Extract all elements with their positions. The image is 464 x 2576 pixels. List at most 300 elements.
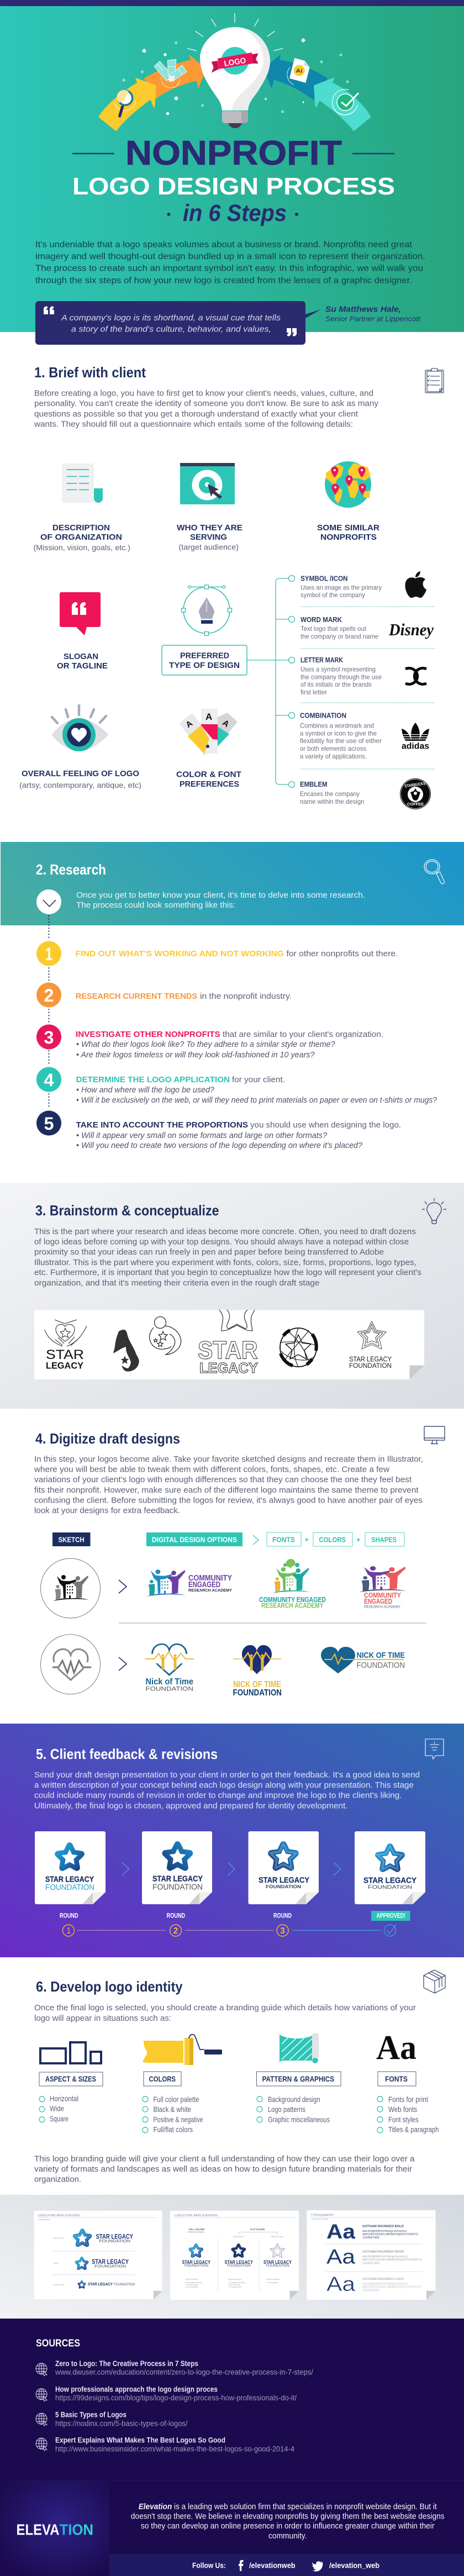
illustration: light bulb with process arrows — [99, 13, 370, 130]
icon: overall feeling eye — [51, 705, 109, 751]
design type: letter mark — [300, 656, 426, 696]
heading: 1. Brief with client — [34, 364, 146, 381]
research item 4 — [76, 1075, 437, 1105]
body text: organization, and that it's meeting their criteria even in the rough draft stage — [34, 1279, 319, 1288]
column: pattern and graphics — [256, 2033, 341, 2124]
label: overall feeling of logo — [19, 769, 141, 789]
column: pattern and graphics: Logo patterns — [268, 2105, 305, 2114]
logo: disney: Disney — [388, 620, 434, 639]
arrow: heart logos — [119, 1657, 126, 1671]
quote marks — [44, 306, 297, 336]
sketch: lined star — [349, 1321, 392, 1369]
icon: slogan speech bubble — [60, 592, 101, 635]
research item 4: DETERMINE THE LOGO APPLICATION — [76, 1075, 230, 1084]
design type: letter mark: LETTER MARK — [300, 656, 343, 664]
brand guide page 3: GOTHAM ROUNDED LIGHT — [362, 2278, 405, 2281]
sketch circle: heart — [41, 1635, 101, 1694]
source 3: 5 Basic Types of Logos — [55, 2411, 126, 2419]
column: aspect and sizes — [39, 2042, 103, 2123]
body text — [34, 389, 379, 429]
logo option: community A: COMMUNITY — [188, 1574, 232, 1583]
round timeline — [63, 1925, 396, 1936]
sketch: lined star: FOUNDATION — [349, 1362, 392, 1369]
round labels — [60, 1913, 292, 1919]
body text: variations of your client's logo with enough differences so that they can choose the one they feel best — [34, 1476, 412, 1484]
brand guide page 3: 1234567890 — [362, 2289, 379, 2293]
quote attribution: Senior Partner at Lippencott — [325, 315, 421, 323]
brand guide page 1: STAR LEGACY — [88, 2282, 113, 2287]
title: NONPROFIT — [125, 134, 342, 172]
tag: sketch — [52, 1532, 91, 1546]
tags: fonts colors shapes: COLORS — [319, 1536, 346, 1544]
logo: starbucks: STARBUCKS — [404, 781, 426, 789]
round 1 card: FOUNDATION — [45, 1883, 94, 1892]
column: colors: COLORS — [149, 2074, 176, 2083]
research item 3: • Are their logos timeless or will they look old-fashioned in 10 years? — [76, 1051, 315, 1060]
column: pattern and graphics: Background design — [268, 2095, 320, 2104]
label: who they are serving: WHO THEY ARE — [177, 523, 242, 533]
design type: combination: flexibility for the use of either — [300, 737, 382, 745]
brand guide page 3: 1234567890 — [362, 2236, 379, 2240]
label: description of organization: (Mission, vision, goals, etc.) — [33, 543, 130, 552]
design type: letter mark: first letter — [300, 688, 327, 696]
brand guide page 3: GOTHAM ROUNDED BOLD — [362, 2225, 404, 2229]
icon: chat bubble — [425, 1739, 444, 1759]
design type: combination: COMBINATION — [300, 712, 346, 720]
panel: sources — [0, 2319, 464, 2576]
panel: step 3 brainstorm — [0, 1183, 464, 1409]
logo: adidas — [402, 723, 429, 751]
title: in 6 Steps — [183, 200, 287, 226]
brand guide page 2: 1 single color printing — [228, 2283, 240, 2286]
column: aspect and sizes: Square — [50, 2114, 68, 2123]
brand guide page 1: STAR LEGACY — [92, 2258, 129, 2266]
column: fonts — [376, 2029, 439, 2134]
source 4: http://www.businessinsider.com/what-makes-the-best-logos-so-good-2014-4 — [55, 2445, 294, 2453]
body text: Illustrator. This is the part where you experiment with fonts, colors, size, forms, proportions, logo types, — [34, 1258, 416, 1267]
design type: word mark: Text logo that spells out — [300, 625, 367, 633]
logo option: community A — [146, 1569, 232, 1597]
intro text: Once you get to better know your client, it's time to delve into some research. — [76, 891, 365, 900]
round 2 card: STAR LEGACY — [152, 1875, 203, 1884]
approved card: FOUNDATION — [368, 1884, 412, 1890]
research timeline — [36, 889, 61, 1136]
sketch: outlined star legacy: LEGACY — [199, 1360, 258, 1376]
round 2 card — [142, 1831, 212, 1904]
label: description of organization — [33, 523, 130, 552]
step 1 node — [36, 941, 61, 966]
round 1 card — [35, 1831, 106, 1904]
follow us bar — [109, 2554, 464, 2576]
closing text: This logo branding guide will give your client a full understanding of how they can use their logo over a — [34, 2154, 415, 2164]
design type: emblem: EMBLEM — [300, 781, 327, 788]
column: aspect and sizes: Wide — [50, 2104, 64, 2113]
research item 2 — [76, 992, 292, 1001]
panel: step 5 client feedback — [0, 1724, 464, 1957]
logo option: nick of time C — [321, 1647, 405, 1673]
brand guide page 2: FOUNDATION — [227, 2264, 251, 2268]
body text — [34, 2004, 416, 2023]
icon: clipboard — [425, 368, 444, 393]
icon: frames — [40, 2042, 101, 2063]
source 3: https://nodinx.com/5-basic-types-of-logos/ — [55, 2419, 188, 2427]
research item 2: RESEARCH CURRENT TRENDS — [76, 992, 197, 1001]
design type: emblem — [300, 778, 431, 809]
sketch: hands and star: LEGACY — [46, 1361, 84, 1371]
brand guide page 3: Aa — [326, 2246, 355, 2268]
step 5 node: 5 — [44, 1114, 54, 1134]
column: aspect and sizes: ASPECT & SIZES — [45, 2074, 96, 2083]
column: pattern and graphics: Graphic miscellaneous — [268, 2115, 330, 2124]
design type: symbol icon — [300, 571, 426, 599]
body text: questions as possible so that you get a thorough understand of exactly what your client — [34, 410, 358, 419]
brand guide page 1: FOUNDATION — [114, 2283, 135, 2287]
brand guide page 1: Wide — [53, 2262, 59, 2264]
follow us bar: /elevationweb — [249, 2561, 296, 2569]
icon: colour and font cards: A — [220, 718, 231, 729]
brand guide page 2: LOGOTYPE APPLICATIONS — [175, 2214, 218, 2217]
body text — [34, 1455, 423, 1515]
logo ribbon: LOGO — [223, 56, 246, 69]
label: some similar nonprofits — [317, 523, 379, 542]
source 2 — [36, 2385, 297, 2402]
icon: monitor — [424, 1426, 445, 1444]
brand guide page 1 — [34, 2211, 162, 2299]
round 2 card: FOUNDATION — [152, 1883, 203, 1892]
design type: word mark — [300, 616, 434, 640]
brand guide page 2: 1 embroidery — [266, 2281, 278, 2284]
tags: fonts colors shapes: FONTS — [272, 1536, 295, 1544]
research item 2: in the nonprofit industry. — [200, 992, 292, 1001]
icon: colour and font cards: A — [184, 719, 194, 730]
brand guide page 1: FOUNDATION — [99, 2238, 130, 2243]
body text: a written description of your concept behind each logo design along with your presentation. This stage — [34, 1781, 414, 1790]
design type: combination: a symbol or icon to give the — [300, 729, 377, 737]
panel: step 4 digitize — [34, 1426, 445, 1698]
body text: Before creating a logo, you have to first get to know your client's needs, values, culture, and — [34, 389, 373, 398]
round labels: ROUND — [273, 1913, 292, 1919]
follow us bar: /elevation_web — [329, 2561, 379, 2569]
brand guide page 3: TYPOGRAPHY — [310, 2214, 334, 2217]
brand guide page 2: 1 2-4 separate prints — [228, 2285, 241, 2288]
arrow: blue — [264, 55, 327, 99]
research item 5: you should use when designing the logo. — [250, 1120, 401, 1130]
label: some similar nonprofits: NONPROFITS — [320, 533, 377, 542]
about text: doesn't stop there. We believe in elevating nonprofits by giving them the best website designs — [131, 2512, 445, 2521]
brand guide page 3: abcdefghijklmnñopqrstuvwxyz — [362, 2283, 408, 2286]
heading: 3. Brainstorm & conceptualize — [35, 1202, 219, 1219]
icon: pattern roll — [280, 2033, 319, 2063]
brand guide page 2: FULL COLOUR — [189, 2228, 205, 2231]
research item 1: FIND OUT WHAT'S WORKING AND NOT WORKING — [76, 949, 284, 958]
icon: check mark — [333, 89, 358, 115]
icon: light bulb outline — [422, 1198, 446, 1224]
brand guide page 2: STAR LEGACY — [263, 2259, 292, 2266]
column: colors: Positive & negative — [154, 2115, 203, 2124]
research item 1 — [76, 949, 398, 958]
elevation logo: TION — [60, 2521, 93, 2538]
label: who they are serving — [177, 523, 242, 551]
icon: magnifier — [114, 90, 136, 116]
approved card — [355, 1831, 425, 1904]
step 4 node: 4 — [44, 1070, 54, 1090]
source 4: Expert Explains What Makes The Best Logos So Good — [55, 2436, 225, 2445]
research item 3: • What do their logos look like? To they adhere to a similar style or theme? — [76, 1040, 335, 1049]
sketch sheet — [34, 1310, 424, 1379]
elevation logo — [0, 2480, 109, 2576]
logo option: nick of time A — [145, 1644, 194, 1693]
brand guide page 1: STAR LEGACY — [96, 2233, 133, 2241]
label: description of organization: DESCRIPTION — [52, 523, 110, 533]
brand guide page 2: Outline Version — [271, 2235, 283, 2238]
icon: document — [62, 463, 103, 503]
brand guide page 3: GOTHAM ROUNDED BOOK — [362, 2250, 404, 2253]
step 2 node: 2 — [44, 986, 54, 1005]
step 3 node: 3 — [44, 1028, 54, 1047]
brand guide page 3: Aa — [326, 2273, 355, 2295]
research item 1: for other nonprofits out there. — [286, 949, 398, 958]
design type: word mark: the company or brand name — [300, 633, 378, 640]
icon: Aa: Aa — [376, 2029, 416, 2067]
intro text: The process could look something like this: — [76, 901, 235, 910]
tags: fonts colors shapes — [267, 1532, 404, 1546]
round timeline: 3 — [280, 1926, 285, 1936]
research item 4: • How and where will the logo be used? — [76, 1086, 215, 1095]
brand guide page 3: ABCDEFGHIJKLMNÑOPQRSTUVWXYZ — [362, 2232, 418, 2236]
brand guide page 2: FOUNDATION — [184, 2264, 208, 2268]
tags: fonts colors shapes: SHAPES — [371, 1536, 397, 1544]
column: fonts: Web fonts — [388, 2105, 417, 2114]
follow us bar: Follow Us: — [192, 2561, 226, 2569]
closing text: variety of formats and landscapes as well as ideas on how to design future branding materials for their — [34, 2164, 412, 2174]
design type: symbol icon: SYMBOL /ICON — [300, 575, 348, 582]
arrow: community logos — [119, 1580, 126, 1593]
brand guide page 2: FOUNDATION — [266, 2264, 289, 2268]
panel: brand guide samples — [0, 2195, 464, 2319]
round timeline: 2 — [173, 1926, 178, 1936]
approved card: STAR LEGACY — [363, 1877, 416, 1885]
label: overall feeling of logo: (artsy, contemporary, antique, etc) — [19, 781, 141, 789]
body text: confusing the client. Before submitting the logos for review, it's always good to have another pair of eyes — [34, 1496, 423, 1505]
arrows between rounds — [122, 1863, 341, 1876]
sketch circle: community — [41, 1558, 101, 1618]
icon: paint roller — [143, 2035, 222, 2065]
label: colour and font preferences: COLOR & FONT — [176, 770, 241, 779]
round timeline: 1 — [66, 1926, 71, 1936]
source 4 — [36, 2436, 294, 2453]
arrow: mint — [315, 78, 370, 130]
source 1: www.dwuser.com/education/content/zero-to-logo-the-creative-process-in-7-steps/ — [55, 2368, 313, 2377]
about text — [131, 2503, 445, 2541]
logo option: community C: COMMUNITY — [364, 1592, 402, 1599]
design type: letter mark: Uses a symbol representing — [300, 666, 376, 673]
brand guide page 2: 1 high quality mailings — [185, 2283, 198, 2286]
brand guide page 3: Primary fonts — [312, 2217, 328, 2220]
label: some similar nonprofits: SOME SIMILAR — [317, 523, 379, 533]
logo option: community C — [359, 1566, 407, 1609]
brand guide page 3: ABCDEFGHIJKLMNÑOPQRSTUVWXYZ — [362, 2258, 422, 2262]
panel: step 6 develop logo identity — [34, 1970, 445, 2184]
tags: fonts colors shapes: + — [305, 1536, 309, 1544]
logo option: community B — [259, 1559, 326, 1610]
heading: 6. Develop logo identity — [36, 1978, 183, 1995]
brand guide page 2: Usage and applications — [185, 2278, 198, 2280]
design type: combination: a variety of applications. — [300, 752, 367, 760]
intro paragraph: It's undeniable that a logo speaks volumes about a business or brand. Nonprofits need great — [35, 240, 413, 249]
bulb — [200, 27, 270, 128]
label: colour and font preferences — [176, 770, 241, 789]
label: description of organization: OF ORGANIZATION — [40, 533, 122, 542]
body text: In this step, your logos become alive. Take your favorite sketched designs and recreate them in Illustrator, — [34, 1455, 423, 1464]
body text: Once the final logo is selected, you should create a branding guide which details how variations of your — [34, 2004, 416, 2013]
logo option: community B: COMMUNITY ENGAGED — [259, 1596, 326, 1604]
logo option: community C: RESEARCH ACADEMY — [364, 1605, 401, 1609]
label: slogan or tagline: SLOGAN — [64, 652, 98, 661]
closing text: organization. — [34, 2175, 81, 2184]
sketch: hands and star — [45, 1320, 87, 1371]
brand guide page 1: FOUNDATION — [94, 2264, 126, 2269]
body text: proximity so that your ideas can run freely in pen and paper before being transferred to Adobe — [34, 1248, 384, 1257]
tag: sketch: SKETCH — [59, 1536, 85, 1544]
intro text — [76, 891, 365, 910]
sketch: outlined star legacy — [198, 1310, 258, 1376]
design type: combination: Combines a wordmark and — [300, 721, 374, 729]
research item 5 — [76, 1120, 401, 1150]
brand guide page 1: LOGOTYPE APPLICATIONS — [38, 2214, 80, 2217]
step 2 node — [36, 982, 61, 1008]
sketch: mother and stars — [150, 1317, 181, 1355]
preferred type of design box: PREFERRED — [180, 651, 229, 661]
approved tag — [371, 1911, 410, 1921]
logo option: community A: ENGAGED — [188, 1581, 220, 1589]
title — [72, 134, 395, 226]
column: aspect and sizes: Horizontal — [50, 2094, 78, 2103]
icon: colour swatches — [154, 59, 187, 88]
brand guide page 3: abcdefghijklmnñopqrstuvwxyz — [362, 2255, 408, 2258]
brand guide page 2: (Preferred Version) — [188, 2231, 205, 2233]
panel: footer — [0, 2480, 464, 2576]
sketch: woven star — [280, 1328, 317, 1367]
brand guide page 1: Super Wide — [53, 2283, 65, 2286]
column: fonts: Titles & paragraph — [388, 2125, 439, 2134]
body text: Send your draft design presentation to your client in order to get their feedback. It's a good idea to send — [34, 1771, 420, 1780]
brand guide page 1: Horizontal — [53, 2237, 64, 2240]
sketch: outlined star legacy: STAR — [198, 1336, 258, 1364]
brand guide page 1: Variations — [38, 2218, 50, 2221]
round labels: ROUND — [60, 1913, 78, 1919]
brand guide page 2: Usage and applications — [228, 2278, 241, 2280]
body text: personality. You can't create the identity of someone you don't know. Be sure to ask as many — [34, 399, 379, 408]
logo: adidas: adidas — [402, 741, 429, 751]
logo option: nick of time C: FOUNDATION — [357, 1661, 405, 1670]
logo option: nick of time A: Nick of Time — [146, 1677, 193, 1687]
preferred type of design box — [162, 645, 247, 675]
design type: word mark: WORD MARK — [300, 616, 342, 624]
logo option: nick of time B: NICK OF TIME — [233, 1680, 281, 1689]
research item 5: TAKE INTO ACCOUNT THE PROPORTIONS — [76, 1120, 248, 1130]
column: colors: Black & white — [154, 2105, 191, 2114]
body text: This is the part where your research and ideas become more concrete. Often, you need to draft dozens — [34, 1228, 416, 1236]
quote callout — [35, 301, 321, 345]
intro paragraph: imagery and well thought-out design bundled up in a small icon to represent their organization. — [35, 252, 425, 261]
intro paragraph — [35, 240, 425, 285]
label: colour and font preferences: PREFERENCES — [180, 779, 239, 789]
label: slogan or tagline: OR TAGLINE — [57, 661, 108, 671]
brand guide page 3: Aa — [326, 2220, 355, 2243]
arrow: orange — [145, 55, 205, 98]
heading: 5. Client feedback & revisions — [36, 1746, 218, 1762]
source 1 — [36, 2359, 313, 2377]
brand guide page 3: 1234567890 — [362, 2262, 379, 2265]
column: colors — [143, 2035, 222, 2134]
design type: symbol icon: symbol of the company — [300, 591, 365, 599]
column: pattern and graphics: PATTERN & GRAPHICS — [262, 2074, 334, 2083]
brand guide page 3: ABCDEFGHIJKLMNÑOPQRSTUVWXYZ — [362, 2285, 422, 2289]
research item 5: • Will you need to create two versions of the logo depending on where it's placed? — [76, 1141, 363, 1150]
column: fonts: FONTS — [385, 2074, 408, 2083]
body text: wants. They should fill out a questionnaire which entails some of the following details: — [34, 420, 353, 429]
step 4 node — [36, 1067, 61, 1092]
step 3 node — [36, 1024, 61, 1050]
research item 3 — [76, 1030, 383, 1060]
icon: colour and font cards: A — [205, 712, 212, 722]
design type: letter mark: of its initials or the brands — [300, 681, 372, 688]
icon: Ai document: Ai — [296, 67, 303, 74]
tags: fonts colors shapes: + — [356, 1536, 361, 1544]
brand guide page 2 — [170, 2211, 299, 2300]
column: colors: Full color palette — [154, 2095, 199, 2104]
arrow: yellow — [99, 79, 155, 130]
body text: could include many rounds of revision in order to change and improve the logo to the client's liking. — [34, 1792, 402, 1800]
column: fonts: Font styles — [388, 2115, 419, 2124]
intro paragraph: The process to create such an important symbol isn't easy. In this infographic, we will walk you — [35, 264, 423, 273]
design type: letter mark: the company through the use — [300, 673, 382, 681]
sketch: mermaid shape — [113, 1330, 139, 1372]
preferred type of design box: TYPE OF DESIGN — [169, 661, 240, 670]
research item 4: for your client. — [232, 1075, 285, 1084]
tag: digital design options — [146, 1532, 242, 1546]
column: colors: Full/flat colors — [154, 2125, 193, 2134]
icon: colour and font cards — [179, 709, 238, 756]
logo: starbucks: COFFEE — [407, 803, 424, 807]
brand guide page 2: STAR LEGACY — [182, 2259, 211, 2266]
quote callout: A company's logo is its shorthand, a visual cue that tells — [61, 314, 281, 323]
icon: target window — [180, 463, 235, 504]
source 1: Zero to Logo: The Creative Process in 7 Steps — [55, 2359, 198, 2368]
source 2: https://99designs.com/blog/tips/logo-design-process-how-professionals-do-it/ — [55, 2394, 297, 2402]
title: LOGO DESIGN PROCESS — [72, 173, 395, 200]
brand guide page 2: Usage and applications — [266, 2278, 280, 2280]
research item 3: INVESTIGATE OTHER NONPROFITS — [76, 1030, 220, 1039]
brand guide page 2: 1 low quality color printing — [228, 2281, 245, 2284]
arrow: options — [253, 1535, 259, 1545]
column: fonts: Fonts for print — [388, 2095, 428, 2104]
design type: emblem: Encases the company — [300, 790, 360, 798]
sources heading: SOURCES — [36, 2337, 80, 2348]
round 3 card — [249, 1831, 319, 1904]
design type: symbol icon: Uses an image as the primary — [300, 583, 382, 591]
body text: where you will best be able to tweak them with different colors, fonts, shapes, etc. Create a few — [34, 1465, 390, 1474]
brand guide page 2: FLAT COLOUR — [250, 2228, 265, 2231]
about text: community. — [268, 2532, 307, 2541]
icon: Ai document — [287, 58, 310, 85]
label: slogan or tagline — [57, 652, 108, 671]
icon: world map with pins — [325, 461, 371, 508]
approved tag: APPROVED! — [377, 1913, 405, 1919]
heading: 2. Research — [36, 861, 106, 878]
logo option: community C: ENGAGED — [364, 1598, 392, 1605]
research item 4: • Will it be exclusively on the web, or will they need to print materials on paper or even on t-shirts or mugs? — [76, 1096, 437, 1105]
